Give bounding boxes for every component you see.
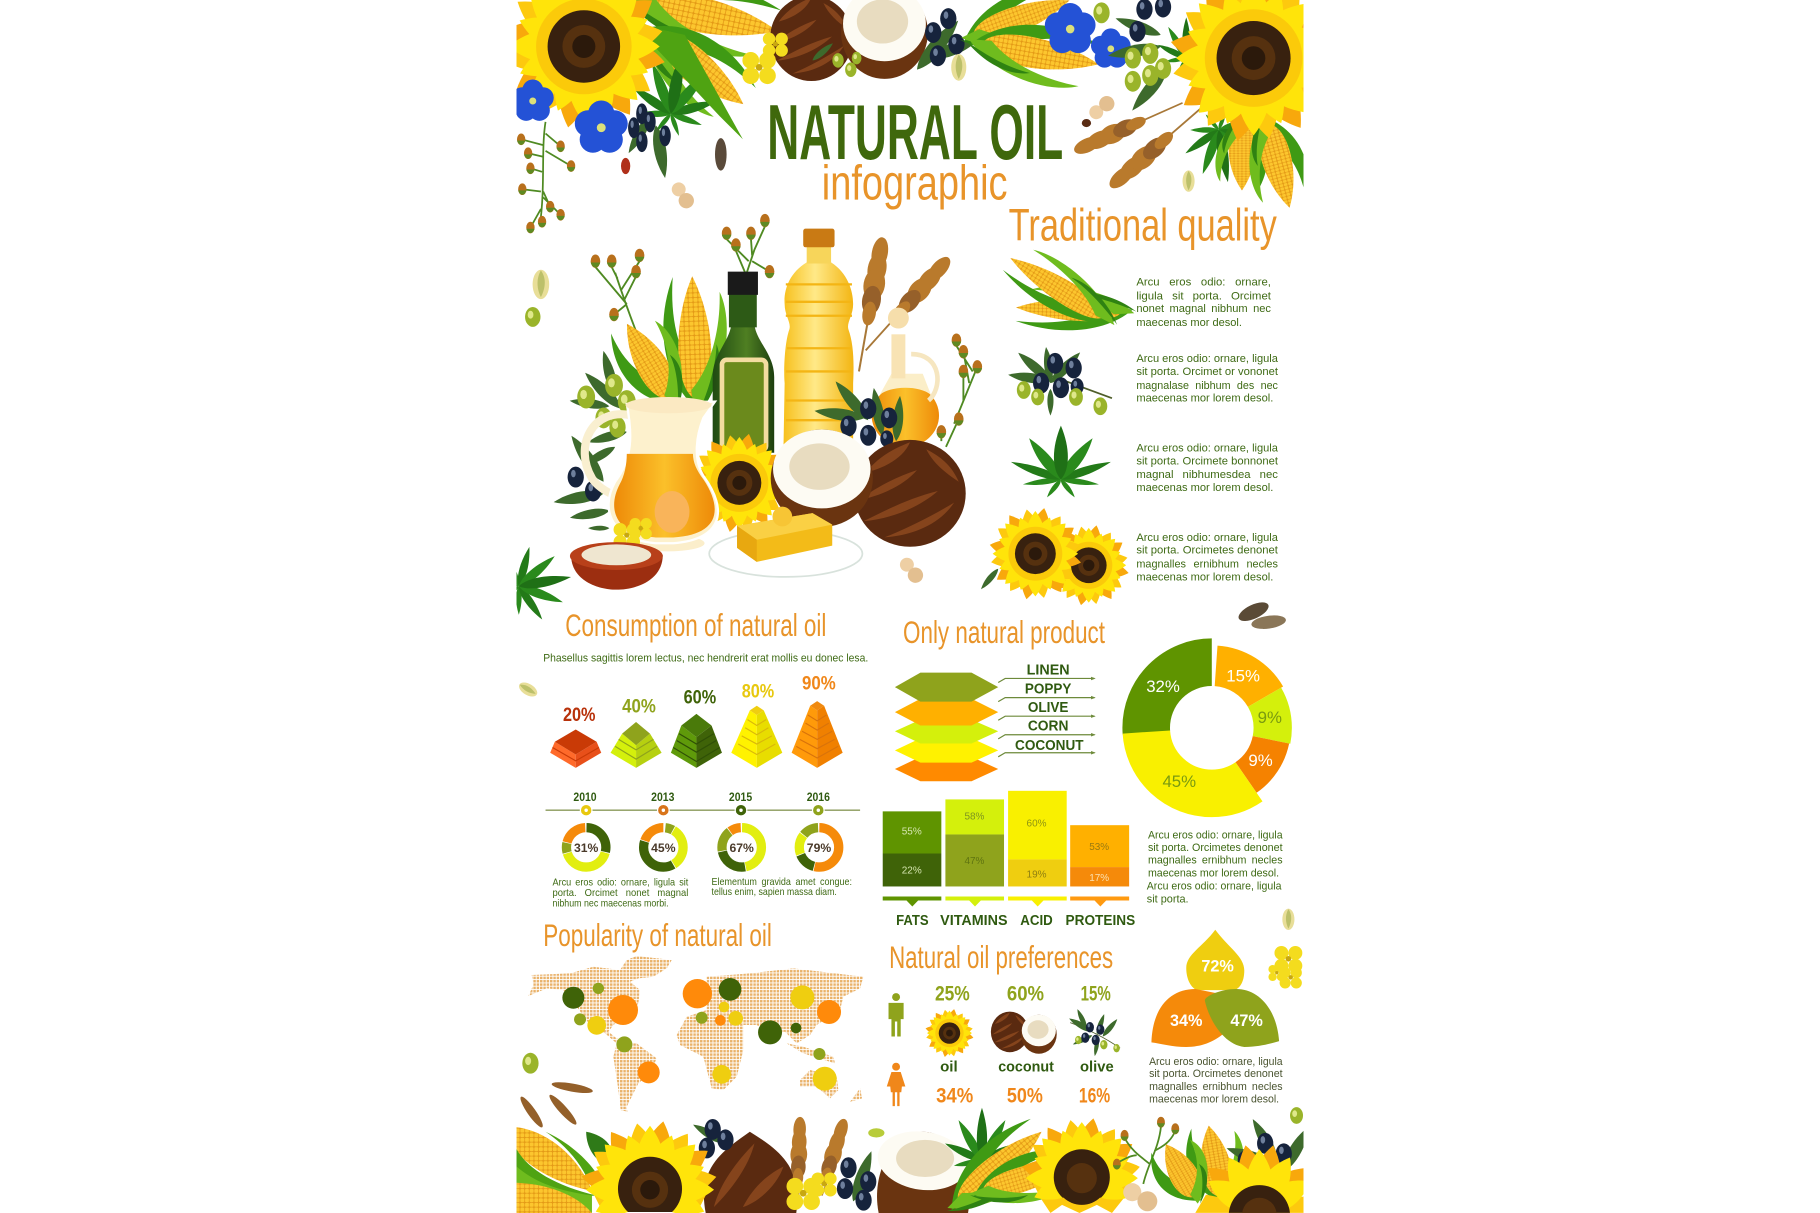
- timeline: 2016: [807, 790, 830, 804]
- subtitle: infographic: [822, 157, 1008, 211]
- title: NATURAL OIL: [767, 90, 1063, 176]
- donut chart: oil share: 9%: [1248, 751, 1273, 770]
- text block: corn: ligula sit porta. Orcimet: [1136, 290, 1272, 302]
- olive branch, lower left: [554, 436, 616, 520]
- donut chart: oil share: 45%: [1162, 772, 1196, 791]
- pyramid 60%: 60%: [684, 686, 717, 708]
- text block: hemp: Arcu eros odio: ornare, ligula: [1136, 443, 1279, 455]
- heading: preferences: Natural oil preferences: [889, 940, 1113, 975]
- illustration: whole coconut: [854, 440, 966, 547]
- arrows and oil labels: POPPY: [1025, 681, 1071, 698]
- illustration: sunflower top left: [516, 0, 665, 128]
- text block: corn: Arcu eros odio: ornare,: [1136, 277, 1271, 289]
- text block: preferences note: maecenas mor lorem desol.: [1149, 1094, 1279, 1106]
- stacked bar chart: 19%: [1027, 870, 1047, 881]
- text block: chart note: sit porta. Orcimetes denonet: [1148, 842, 1283, 854]
- percent row: women: 50%: [1007, 1085, 1043, 1108]
- donut chart 2015: [722, 828, 761, 867]
- text: left note: nibhum nec maecenas morbi.: [552, 899, 669, 910]
- text block: preferences note: magnalles ernibhum necles: [1149, 1081, 1283, 1093]
- icon: olive branch: [1007, 347, 1112, 416]
- illustration: olives and hemp, left: [624, 103, 671, 179]
- text block: hemp: magnal nibhumesdea nec: [1136, 469, 1278, 481]
- donut chart: oil share: 9%: [1258, 708, 1282, 727]
- illustration: corn in hero: [611, 276, 727, 401]
- illustration: millet stalks: [518, 1080, 594, 1130]
- illustration: coconuts, top: [770, 0, 928, 81]
- text block: chart note: sit porta.: [1147, 893, 1189, 905]
- text block: sunflower: maecenas mor lorem desol.: [1136, 571, 1273, 583]
- illustration: sunflower top right and hanging corn: [1171, 0, 1304, 208]
- icon: coconuts: [991, 1012, 1057, 1054]
- text block: olive: [1136, 353, 1279, 405]
- text block: olive: Arcu eros odio: ornare, ligula: [1136, 353, 1279, 365]
- illustration: olives bottom right: [1225, 1116, 1315, 1175]
- dotted world map with bubbles: [528, 956, 863, 1112]
- text block: chart note: magnalles ernibhum necles: [1148, 855, 1283, 867]
- text block: sunflower: sit porta. Orcimetes denonet: [1136, 545, 1279, 557]
- pyramid 60%: [671, 686, 722, 768]
- donut chart: oil share: 15%: [1226, 666, 1260, 685]
- illustration: sunflower bottom left: [579, 1119, 719, 1213]
- text: right note: [712, 877, 852, 898]
- petal chart: 72%: [1201, 958, 1234, 976]
- text block: sunflower: [1136, 532, 1279, 583]
- percent row: men: 60%: [1007, 983, 1044, 1006]
- petal chart: 47%: [1230, 1012, 1263, 1030]
- stacked bar chart: PROTEINS: [1066, 913, 1135, 929]
- icon: peanut: [900, 558, 924, 583]
- stacked bar chart: ACID: [1020, 913, 1053, 929]
- illustration: hemp leaf bottom: [943, 1108, 1021, 1179]
- donut chart: oil share: [1146, 662, 1282, 793]
- illustration: plate and butter: [709, 507, 862, 577]
- illustration: yellow oil bottle: [783, 229, 854, 447]
- illustration: flax sprig bottom: [1113, 1117, 1179, 1184]
- text: left note: [552, 878, 688, 910]
- panel: consumption of natural oil: [543, 608, 868, 910]
- arrows and oil labels: LINEN: [1027, 661, 1070, 678]
- illustration: yellow flowers and olives bottom: [786, 1149, 877, 1211]
- stacked bar chart: 22%: [902, 865, 922, 876]
- heading: traditional quality: Traditional quality: [1009, 199, 1277, 250]
- icon: two sunflowers: [979, 506, 1130, 607]
- stacked bar chart: 55%: [902, 827, 922, 838]
- illustration: corn and olives, top center right: [917, 0, 1098, 88]
- text: right note: Elementum gravida amet congue:: [712, 877, 852, 888]
- text block: olive: magnalase nibhum des nec: [1136, 380, 1278, 392]
- icon: pistachio and small olive, left margin: [525, 270, 549, 327]
- illustration: corn and leaves, top left: [636, 0, 780, 140]
- percent row: men: [935, 983, 1111, 1006]
- timeline: 2015: [729, 790, 752, 804]
- text block: hemp: maecenas mor lorem desol.: [1136, 482, 1273, 494]
- illustration: olive branches in hero: [553, 349, 636, 522]
- pyramid 90%: 90%: [802, 672, 836, 694]
- icon: olive branch small: [1068, 1008, 1120, 1056]
- donut chart 2016: [799, 828, 839, 867]
- text block: hemp: sit porta. Orcimete bonnonet: [1136, 455, 1279, 467]
- text: right note: tellus enim, sapien massa diam.: [712, 887, 837, 898]
- timeline: 2010: [573, 790, 597, 804]
- illustration: bowl of seeds: [570, 542, 663, 590]
- timeline: [546, 790, 860, 817]
- illustration: coconut bottom: [704, 1132, 797, 1213]
- text block: preferences note: Arcu eros odio: ornare, ligula: [1149, 1056, 1283, 1068]
- stacked bar chart: 60%: [1027, 818, 1047, 829]
- text block: sunflower: Arcu eros odio: ornare, ligula: [1136, 532, 1279, 544]
- illustration: corn bottom left: [517, 1127, 612, 1213]
- oil labels: olive: [1080, 1058, 1114, 1075]
- stacked bar chart: [883, 791, 1135, 929]
- title: [767, 90, 1063, 211]
- illustration: olive oil bottle: [713, 272, 774, 453]
- pyramid 40%: [611, 696, 662, 768]
- icon: man: [889, 993, 904, 1037]
- panel: natural oil preferences: [887, 930, 1283, 1108]
- pyramid chart: [550, 672, 843, 768]
- illustration: top floral and crop border: [494, 0, 1340, 1213]
- text block: preferences note: sit porta. Orcimetes denonet: [1149, 1068, 1283, 1080]
- percent row: women: 16%: [1079, 1085, 1111, 1108]
- illustration: yellow rapeseed flowers, top: [742, 33, 835, 84]
- icon: sesame pods: [1236, 599, 1287, 631]
- stacked bar chart: FATS: [896, 913, 929, 929]
- illustration: hemp leaf, left margin: [516, 547, 571, 620]
- illustration: flax sprigs in hero: [591, 214, 982, 447]
- illustration: half coconut bottom: [874, 1126, 972, 1213]
- pyramid 40%: 40%: [622, 696, 656, 718]
- icon: corn: [1003, 250, 1136, 330]
- oil labels: coconut: [998, 1058, 1054, 1075]
- stacked bar chart: 58%: [964, 811, 985, 822]
- text block: olive: maecenas mor lorem desol.: [1136, 393, 1273, 405]
- illustration: wheat in hero: [858, 237, 950, 372]
- illustration: sunflower bottom right: [1195, 1142, 1323, 1213]
- heading: popularity: Popularity of natural oil: [543, 918, 772, 953]
- donut chart: oil share: 32%: [1146, 677, 1180, 696]
- text block: hemp: [1136, 443, 1279, 494]
- icon: green bean: [868, 1128, 884, 1138]
- illustration: sunflower bottom center: [1020, 1116, 1142, 1213]
- text block: sunflower: magnalles ernibhum necles: [1136, 559, 1278, 571]
- petal chart: [1151, 930, 1279, 1047]
- illustration: half coconut: [771, 429, 873, 527]
- percent row: women: [936, 1085, 1111, 1108]
- panel: popularity of natural oil: [528, 918, 863, 1112]
- icon: hemp leaf: [1009, 426, 1113, 498]
- donut chart 2010: [566, 828, 606, 867]
- heading: only natural product: Only natural product: [903, 615, 1105, 650]
- text block: corn: maecenas mor desol.: [1136, 317, 1242, 329]
- icon: green olive bottom right: [1290, 1107, 1303, 1124]
- illustration: flax sprig, left: [517, 122, 575, 233]
- illustration: hero oil products: [553, 214, 982, 590]
- icon: blue flax flowers, left: [512, 80, 628, 153]
- text block: preferences note: [1149, 1056, 1283, 1106]
- heading: consumption: Consumption of natural oil: [565, 608, 826, 643]
- illustration: bottom crop border: [517, 1107, 1323, 1213]
- illustration: corn bottom right: [1143, 1120, 1252, 1213]
- percent row: men: 25%: [935, 983, 970, 1006]
- text: left note: porta. Orcimet nonet magnal: [552, 888, 688, 899]
- text block: chart note: Arcu eros odio: ornare, ligula: [1147, 881, 1282, 893]
- olive branch, upper left: [569, 349, 636, 447]
- text block: corn: [1136, 277, 1272, 329]
- donut labels: [574, 841, 831, 855]
- illustration: sunflower in hero: [699, 434, 779, 532]
- text block: corn: nonet magnal nibhum nec: [1136, 303, 1271, 315]
- illustration: wheat, top right: [1074, 102, 1200, 188]
- panel: only natural product: [883, 615, 1283, 929]
- stacked bar chart: VITAMINS: [940, 913, 1008, 929]
- icon: pistachio and rapeseed, right: [1268, 909, 1302, 988]
- pyramid 20%: [550, 704, 601, 768]
- text block: olive: sit porta. Orcimet or vononet: [1136, 366, 1279, 378]
- illustration: olives bottom left: [691, 1119, 734, 1158]
- illustration: olive branch over bottle: [814, 378, 905, 447]
- donut chart 2013: [644, 828, 683, 867]
- donut labels: 67%: [730, 841, 754, 855]
- stacked bar chart: 53%: [1089, 842, 1109, 853]
- stacked bar chart: 47%: [964, 856, 985, 867]
- icon: peanut bottom: [1123, 1183, 1157, 1211]
- donut labels: 79%: [807, 841, 831, 855]
- icon: seeds and peanuts: [621, 92, 1195, 211]
- arrows and oil labels: [998, 661, 1096, 757]
- oil labels: [940, 1058, 1114, 1075]
- illustration: oil jug: [585, 397, 718, 551]
- illustration: yellow flowers in hero: [588, 518, 652, 544]
- arrows and oil labels: CORN: [1028, 718, 1068, 735]
- icon: woman: [887, 1063, 905, 1106]
- layered hexagon chart: [895, 673, 998, 781]
- petal chart: 34%: [1170, 1012, 1203, 1030]
- pyramid 20%: 20%: [563, 704, 596, 726]
- pyramid 90%: [792, 672, 843, 768]
- illustration: glass decanter: [872, 308, 939, 447]
- oil labels: oil: [940, 1058, 958, 1075]
- text: left note: Arcu eros odio: ornare, ligula sit: [552, 878, 688, 889]
- pyramid 80%: 80%: [742, 681, 775, 703]
- arrows and oil labels: COCONUT: [1015, 737, 1084, 754]
- percent row: women: 34%: [936, 1085, 974, 1108]
- pyramid 80%: [731, 681, 782, 768]
- icon: green olive, map side: [522, 1053, 539, 1074]
- icon: blue flax flowers, top right: [1045, 3, 1131, 68]
- stacked bar chart: 17%: [1089, 873, 1109, 884]
- arrows and oil labels: OLIVE: [1028, 699, 1068, 716]
- icon: sunflower: [925, 1008, 974, 1058]
- text block: chart note: [1147, 830, 1283, 905]
- timeline: 2013: [651, 790, 675, 804]
- percent row: men: 15%: [1081, 983, 1111, 1006]
- illustration: green olives, top center: [832, 52, 861, 77]
- donut labels: 31%: [574, 841, 599, 855]
- text block: chart note: Arcu eros odio: ornare, ligula: [1148, 830, 1283, 842]
- donut labels: 45%: [651, 841, 676, 855]
- illustration: olive branch, top right: [1093, 0, 1190, 111]
- icon: pistachio, consumption panel: [517, 680, 540, 699]
- illustration: wheat bottom: [789, 1116, 853, 1196]
- subtitle text: Phasellus sagittis lorem lectus, nec hendrerit erat mollis eu donec lesa.: [543, 653, 868, 665]
- illustration: corn bottom center: [930, 1112, 1082, 1213]
- text block: chart note: maecenas mor lorem desol.: [1148, 867, 1279, 879]
